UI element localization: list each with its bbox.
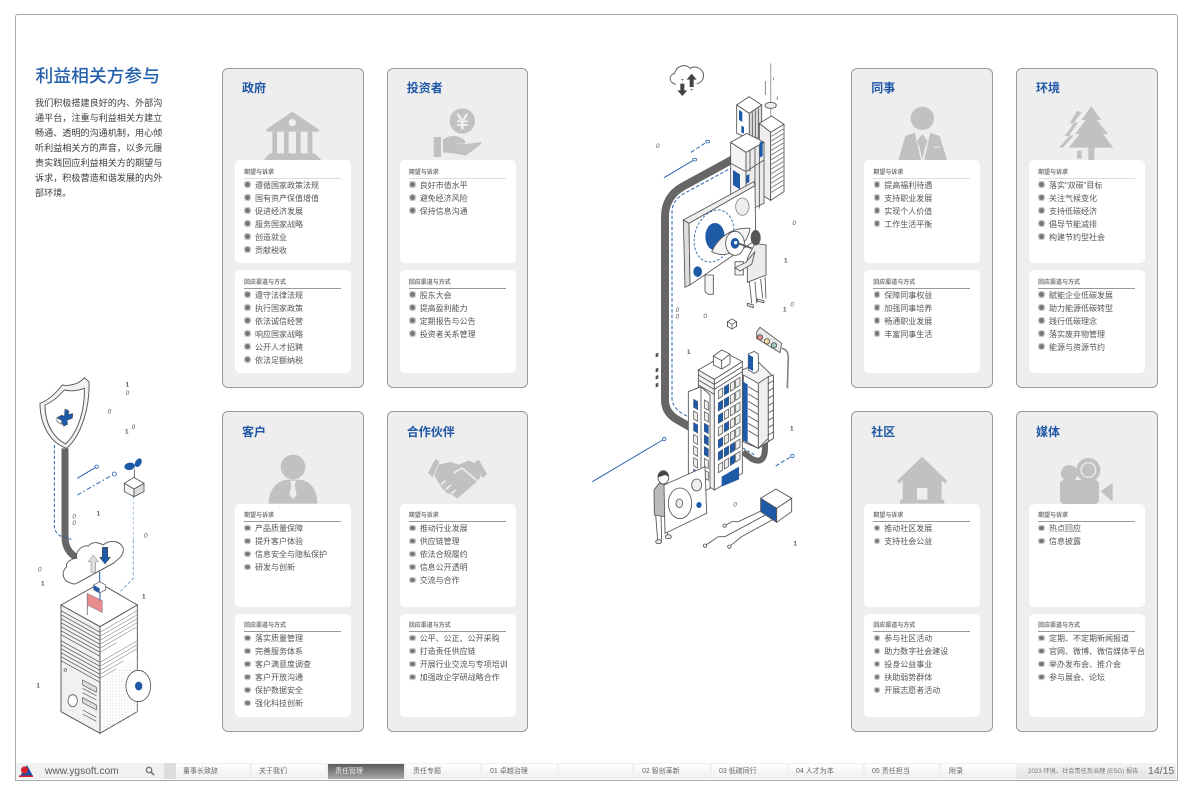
- list: 公平、公正、公开采购: [420, 634, 500, 643]
- data lines and digits upper: [656, 140, 796, 329]
- panel: 社区: [851, 411, 993, 732]
- card heading: 回应渠道与方式: [244, 280, 286, 286]
- icon: server tower with flag and disc: 1: [41, 581, 45, 588]
- list: 良好市值水平: [420, 180, 468, 190]
- list: [244, 524, 327, 572]
- heading: 社区: [871, 425, 895, 439]
- card: response channels: [235, 270, 351, 373]
- data lines and digits upper: 1: [783, 306, 787, 313]
- card: response channels: [1029, 614, 1145, 716]
- list: 信息公开透明: [420, 563, 468, 572]
- card: response channels: [864, 614, 980, 716]
- panel: 环境: [1016, 68, 1158, 388]
- heading: 客户: [242, 425, 266, 439]
- list: 保持信息沟通: [420, 206, 468, 216]
- intro text block: 责实践回应利益相关方的期望与: [35, 158, 162, 168]
- list: 关注气候变化: [1049, 194, 1097, 202]
- list: 强化科技创新: [255, 699, 303, 708]
- nav tab: [789, 764, 862, 779]
- icon: colleague: [898, 106, 947, 160]
- data lines and digits lower: 1: [687, 349, 691, 356]
- list: 提升客户体验: [255, 537, 303, 546]
- data lines and digits upper: 0: [792, 220, 796, 227]
- list: 落实质量管理: [255, 634, 303, 643]
- icon: video camera: [1060, 458, 1113, 504]
- list: 投资者关系管理: [420, 330, 476, 338]
- list: 能源与资源节约: [1049, 342, 1105, 352]
- data lines and digits upper: 1: [784, 257, 788, 264]
- list: [874, 180, 932, 228]
- heading: 政府: [242, 81, 266, 95]
- list: 支持社会公益: [884, 537, 932, 546]
- data lines and digits upper: 0: [676, 314, 680, 321]
- nav tab: [712, 764, 787, 779]
- report name: 2023 环境、社会责任及治理 (ESG) 报告: [1028, 768, 1138, 775]
- card heading: [873, 623, 970, 632]
- nav tab: [406, 764, 480, 779]
- data lines and digits lower: 1: [790, 426, 794, 433]
- list: [408, 290, 476, 338]
- page number: 14/15: [1148, 765, 1174, 777]
- list: 信息披露: [1049, 537, 1081, 546]
- list: 举办发布会、推介会: [1049, 660, 1121, 669]
- list: 研发与创新: [255, 563, 295, 572]
- list: 信息安全与隐私保护: [255, 550, 327, 559]
- card heading: [873, 280, 970, 288]
- data lines and digits upper: 0: [656, 143, 660, 150]
- icon: customer: [268, 454, 318, 504]
- card heading: [873, 170, 970, 178]
- list: 创造就业: [255, 232, 287, 242]
- icon: search: [146, 766, 154, 776]
- nav tab: [865, 764, 939, 779]
- card: expectations: [235, 160, 351, 263]
- nav tab: [635, 764, 709, 779]
- nav tab: 03 低碳同行: [719, 768, 757, 774]
- antenna and towers: [731, 63, 784, 212]
- card heading: 回应渠道与方式: [244, 623, 286, 629]
- card heading: 期望与诉求: [244, 170, 274, 176]
- panel: 客户: [222, 411, 364, 732]
- icon: sprout on cube: [124, 457, 144, 540]
- list: 遵循国家政策法规: [255, 180, 319, 190]
- card: response channels: [400, 270, 516, 373]
- card heading: [409, 280, 506, 288]
- list: 投身公益事业: [884, 660, 932, 669]
- person with panel: [654, 467, 707, 544]
- list: 依法诚信经营: [255, 316, 303, 326]
- nav tab: [176, 764, 249, 779]
- panel: 政府: [222, 68, 364, 388]
- data lines and digits: 0: [144, 533, 148, 540]
- billboard with eye: [683, 182, 756, 294]
- left illustration: security and server: [36, 378, 151, 733]
- data lines and digits: 0: [72, 513, 76, 520]
- list: 贡献税收: [255, 246, 287, 254]
- nav tab: 附录: [949, 768, 963, 774]
- right segment: [1016, 763, 1176, 779]
- list: 促进经济发展: [255, 206, 303, 216]
- list: 开展志愿者活动: [884, 686, 940, 695]
- card heading: [873, 513, 970, 522]
- list: 构建节约型社会: [1049, 232, 1105, 242]
- data lines and digits lower: [592, 319, 797, 548]
- list: 落实废弃物管理: [1049, 330, 1105, 338]
- list: 响应国家战略: [255, 330, 303, 338]
- list: [874, 290, 932, 338]
- list: 赋能企业低碳发展: [1049, 290, 1113, 300]
- card: expectations: [1029, 504, 1145, 606]
- list: 开展行业交流与专项培训: [420, 660, 508, 669]
- card heading: [409, 170, 506, 178]
- heading: 合作伙伴: [407, 425, 455, 439]
- list: 依法合规履约: [420, 550, 468, 559]
- list: 工作生活平衡: [884, 220, 932, 228]
- card heading: 回应渠道与方式: [409, 623, 451, 629]
- list: 助力能源低碳转型: [1049, 304, 1113, 312]
- intro text block: 通平台，注重与利益相关方建立: [35, 112, 162, 122]
- nav tab: [483, 764, 557, 779]
- icon: bank: [264, 112, 322, 160]
- card heading: [244, 623, 341, 632]
- data lines and digits upper: 0: [676, 307, 680, 314]
- website link: www.ygsoft.com: [45, 766, 119, 777]
- list: 依法足额纳税: [255, 356, 303, 364]
- intro text block: 部环境。: [35, 188, 71, 198]
- panel: 媒体: [1016, 411, 1158, 732]
- data lines and digits: 0: [126, 390, 130, 397]
- list: [874, 634, 948, 695]
- heading: 投资者: [407, 81, 443, 95]
- panel: 同事: [851, 68, 993, 388]
- list: 推动社区发展: [884, 524, 932, 533]
- list: [1038, 524, 1081, 546]
- list: [874, 524, 932, 546]
- list: 遵守法律法规: [255, 290, 303, 300]
- nav tab blank: [559, 764, 632, 779]
- pipe: [54, 445, 80, 560]
- nav tab: 董事长致辞: [183, 768, 218, 774]
- icon: server tower with flag and disc: 0: [38, 567, 42, 574]
- card heading: [1038, 513, 1135, 522]
- list: 定期、不定期新闻报道: [1049, 634, 1129, 643]
- icon: server tower with flag and disc: [36, 567, 151, 733]
- list: 倡导节能减排: [1049, 220, 1097, 228]
- list: 畅通职业发展: [884, 316, 932, 326]
- card heading: 回应渠道与方式: [1038, 280, 1080, 286]
- list: 参与展会、论坛: [1049, 673, 1105, 682]
- panel: 合作伙伴: [387, 411, 528, 732]
- nav tab: 责任专题: [413, 768, 441, 774]
- list: 定期报告与公告: [420, 316, 476, 326]
- list: [1038, 290, 1113, 352]
- card: expectations: [235, 504, 351, 606]
- list: [244, 290, 303, 364]
- intro text block: [35, 98, 162, 198]
- card: response channels: [1029, 270, 1145, 373]
- card: expectations: [864, 160, 980, 263]
- list: 保障同事权益: [884, 290, 932, 300]
- icon: cloud with arrows: [63, 540, 133, 593]
- card: expectations: [864, 504, 980, 606]
- list: 供应链管理: [420, 537, 460, 546]
- list: [408, 524, 468, 585]
- list: 支持低碳经济: [1049, 206, 1097, 216]
- list: 国有资产保值增值: [255, 194, 319, 202]
- nav tab: 关于我们: [259, 768, 287, 774]
- card heading: 期望与诉求: [1038, 170, 1068, 176]
- icon: server tower with flag and disc: 1: [142, 593, 146, 600]
- data lines and digits lower: 0: [733, 501, 737, 508]
- list: 公开人才招聘: [255, 342, 303, 352]
- icon: server tower with flag and disc: 1: [36, 682, 40, 689]
- card: response channels: [235, 614, 351, 716]
- list: 支持职业发展: [884, 194, 932, 202]
- center illustration: city and data flow: [592, 63, 797, 548]
- search segment: [164, 763, 176, 779]
- card heading: 期望与诉求: [873, 170, 903, 176]
- card heading: [244, 280, 341, 288]
- data lines and digits: 1: [125, 428, 129, 435]
- list: 客户满意度调查: [255, 660, 311, 669]
- list: [244, 634, 311, 708]
- data lines and digits upper: 0: [790, 302, 794, 309]
- intro text block: 畅通、透明的沟通机制，用心倾: [35, 128, 162, 138]
- card heading: 期望与诉求: [409, 513, 439, 519]
- icon: logo: [19, 765, 33, 777]
- list: [408, 634, 508, 682]
- list: [1038, 634, 1145, 682]
- intro text block: 听利益相关方的声音，以多元履: [35, 142, 162, 152]
- data lines and digits lower: 1: [793, 541, 797, 548]
- list: 参与社区活动: [884, 634, 932, 643]
- icon: hand with coin: [434, 108, 482, 157]
- nav tab: 05 责任担当: [872, 768, 910, 774]
- traffic light: [757, 327, 788, 388]
- list: 交流与合作: [420, 576, 460, 585]
- list: 服务国家战略: [255, 220, 303, 228]
- nav tab active: [328, 764, 404, 779]
- list: 实现个人价值: [884, 206, 932, 216]
- list: [1038, 180, 1105, 242]
- list: 热点回应: [1049, 524, 1081, 533]
- list: 打造责任供应链: [420, 647, 476, 656]
- intro text block: 我们积极搭建良好的内、外部沟: [35, 98, 162, 108]
- data lines and digits: 1: [97, 511, 101, 518]
- card heading: 期望与诉求: [1038, 513, 1068, 519]
- list: [408, 180, 468, 216]
- bottom navigation bar: [16, 763, 1176, 779]
- nav tab: 02 智创革新: [642, 768, 680, 774]
- icon: house: [897, 456, 948, 504]
- nav tab: 01 卓越治理: [490, 768, 528, 774]
- card heading: [409, 513, 506, 522]
- main building: [688, 350, 742, 491]
- list: 践行低碳理念: [1049, 316, 1097, 326]
- data lines and digits: [72, 382, 148, 540]
- icon: trees: [1059, 106, 1113, 160]
- list: [244, 180, 319, 254]
- list: 助力数字社会建设: [884, 647, 948, 656]
- card heading: [244, 170, 341, 178]
- pipes: [665, 157, 765, 461]
- person at billboard: [735, 230, 766, 308]
- heading: 环境: [1036, 81, 1060, 95]
- list: 完善服务体系: [255, 647, 303, 656]
- list: 官网、微博、微信媒体平台: [1049, 647, 1145, 656]
- data lines and digits: 0: [72, 520, 76, 527]
- heading: 同事: [871, 81, 895, 95]
- list: 推动行业发展: [420, 524, 468, 533]
- list: 股东大会: [420, 290, 452, 300]
- nav tab: [252, 764, 325, 779]
- panel: 投资者: [387, 68, 528, 388]
- list: 客户开放沟通: [255, 673, 303, 682]
- heading: 媒体: [1036, 425, 1060, 439]
- list: 加强政企学研战略合作: [420, 673, 500, 682]
- intro text block: 诉求，积极营造和谐发展的内外: [35, 172, 162, 182]
- list: 加强同事培养: [884, 304, 932, 312]
- card heading: 期望与诉求: [409, 170, 439, 176]
- card heading: 回应渠道与方式: [1038, 623, 1080, 629]
- card: expectations: [400, 504, 516, 606]
- card heading: 回应渠道与方式: [873, 623, 915, 629]
- list: 执行国家政策: [255, 304, 303, 312]
- card heading: [1038, 623, 1135, 632]
- right tall building: [742, 351, 773, 448]
- icon: shield: [40, 378, 89, 448]
- card heading: [1038, 280, 1135, 288]
- card heading: [1038, 170, 1135, 178]
- card heading: 回应渠道与方式: [873, 280, 915, 286]
- card: response channels: [864, 270, 980, 373]
- card heading: [244, 513, 341, 522]
- nav tab: [942, 764, 1016, 779]
- list: 扶助弱势群体: [884, 673, 932, 682]
- data lines and digits upper: 0: [703, 313, 707, 320]
- card heading: 期望与诉求: [244, 513, 274, 519]
- chip cube with wires: [703, 489, 792, 548]
- list: 产品质量保障: [255, 524, 303, 533]
- nav tab: 04 人才为本: [796, 768, 834, 774]
- icon: handshake: [428, 459, 487, 498]
- list: 丰富同事生活: [884, 330, 932, 338]
- list: 落实“双碳”目标: [1049, 180, 1102, 190]
- list: 提高盈利能力: [420, 304, 468, 312]
- card: response channels: [400, 614, 516, 716]
- card: expectations: [1029, 160, 1145, 263]
- card heading: [409, 623, 506, 632]
- list: 保护数据安全: [255, 686, 303, 695]
- data lines and digits: 1: [126, 382, 130, 389]
- title: 利益相关方参与: [36, 66, 160, 86]
- icon: cloud transfer: [670, 66, 704, 96]
- card: expectations: [400, 160, 516, 263]
- nav tab active: 责任管理: [335, 768, 363, 774]
- list: 提高福利待遇: [884, 180, 932, 190]
- list: 避免经济风险: [420, 194, 468, 202]
- card heading: 期望与诉求: [873, 513, 903, 519]
- card heading: 回应渠道与方式: [409, 280, 451, 286]
- data lines and digits: 0: [108, 409, 112, 416]
- data lines and digits: 0: [132, 424, 136, 431]
